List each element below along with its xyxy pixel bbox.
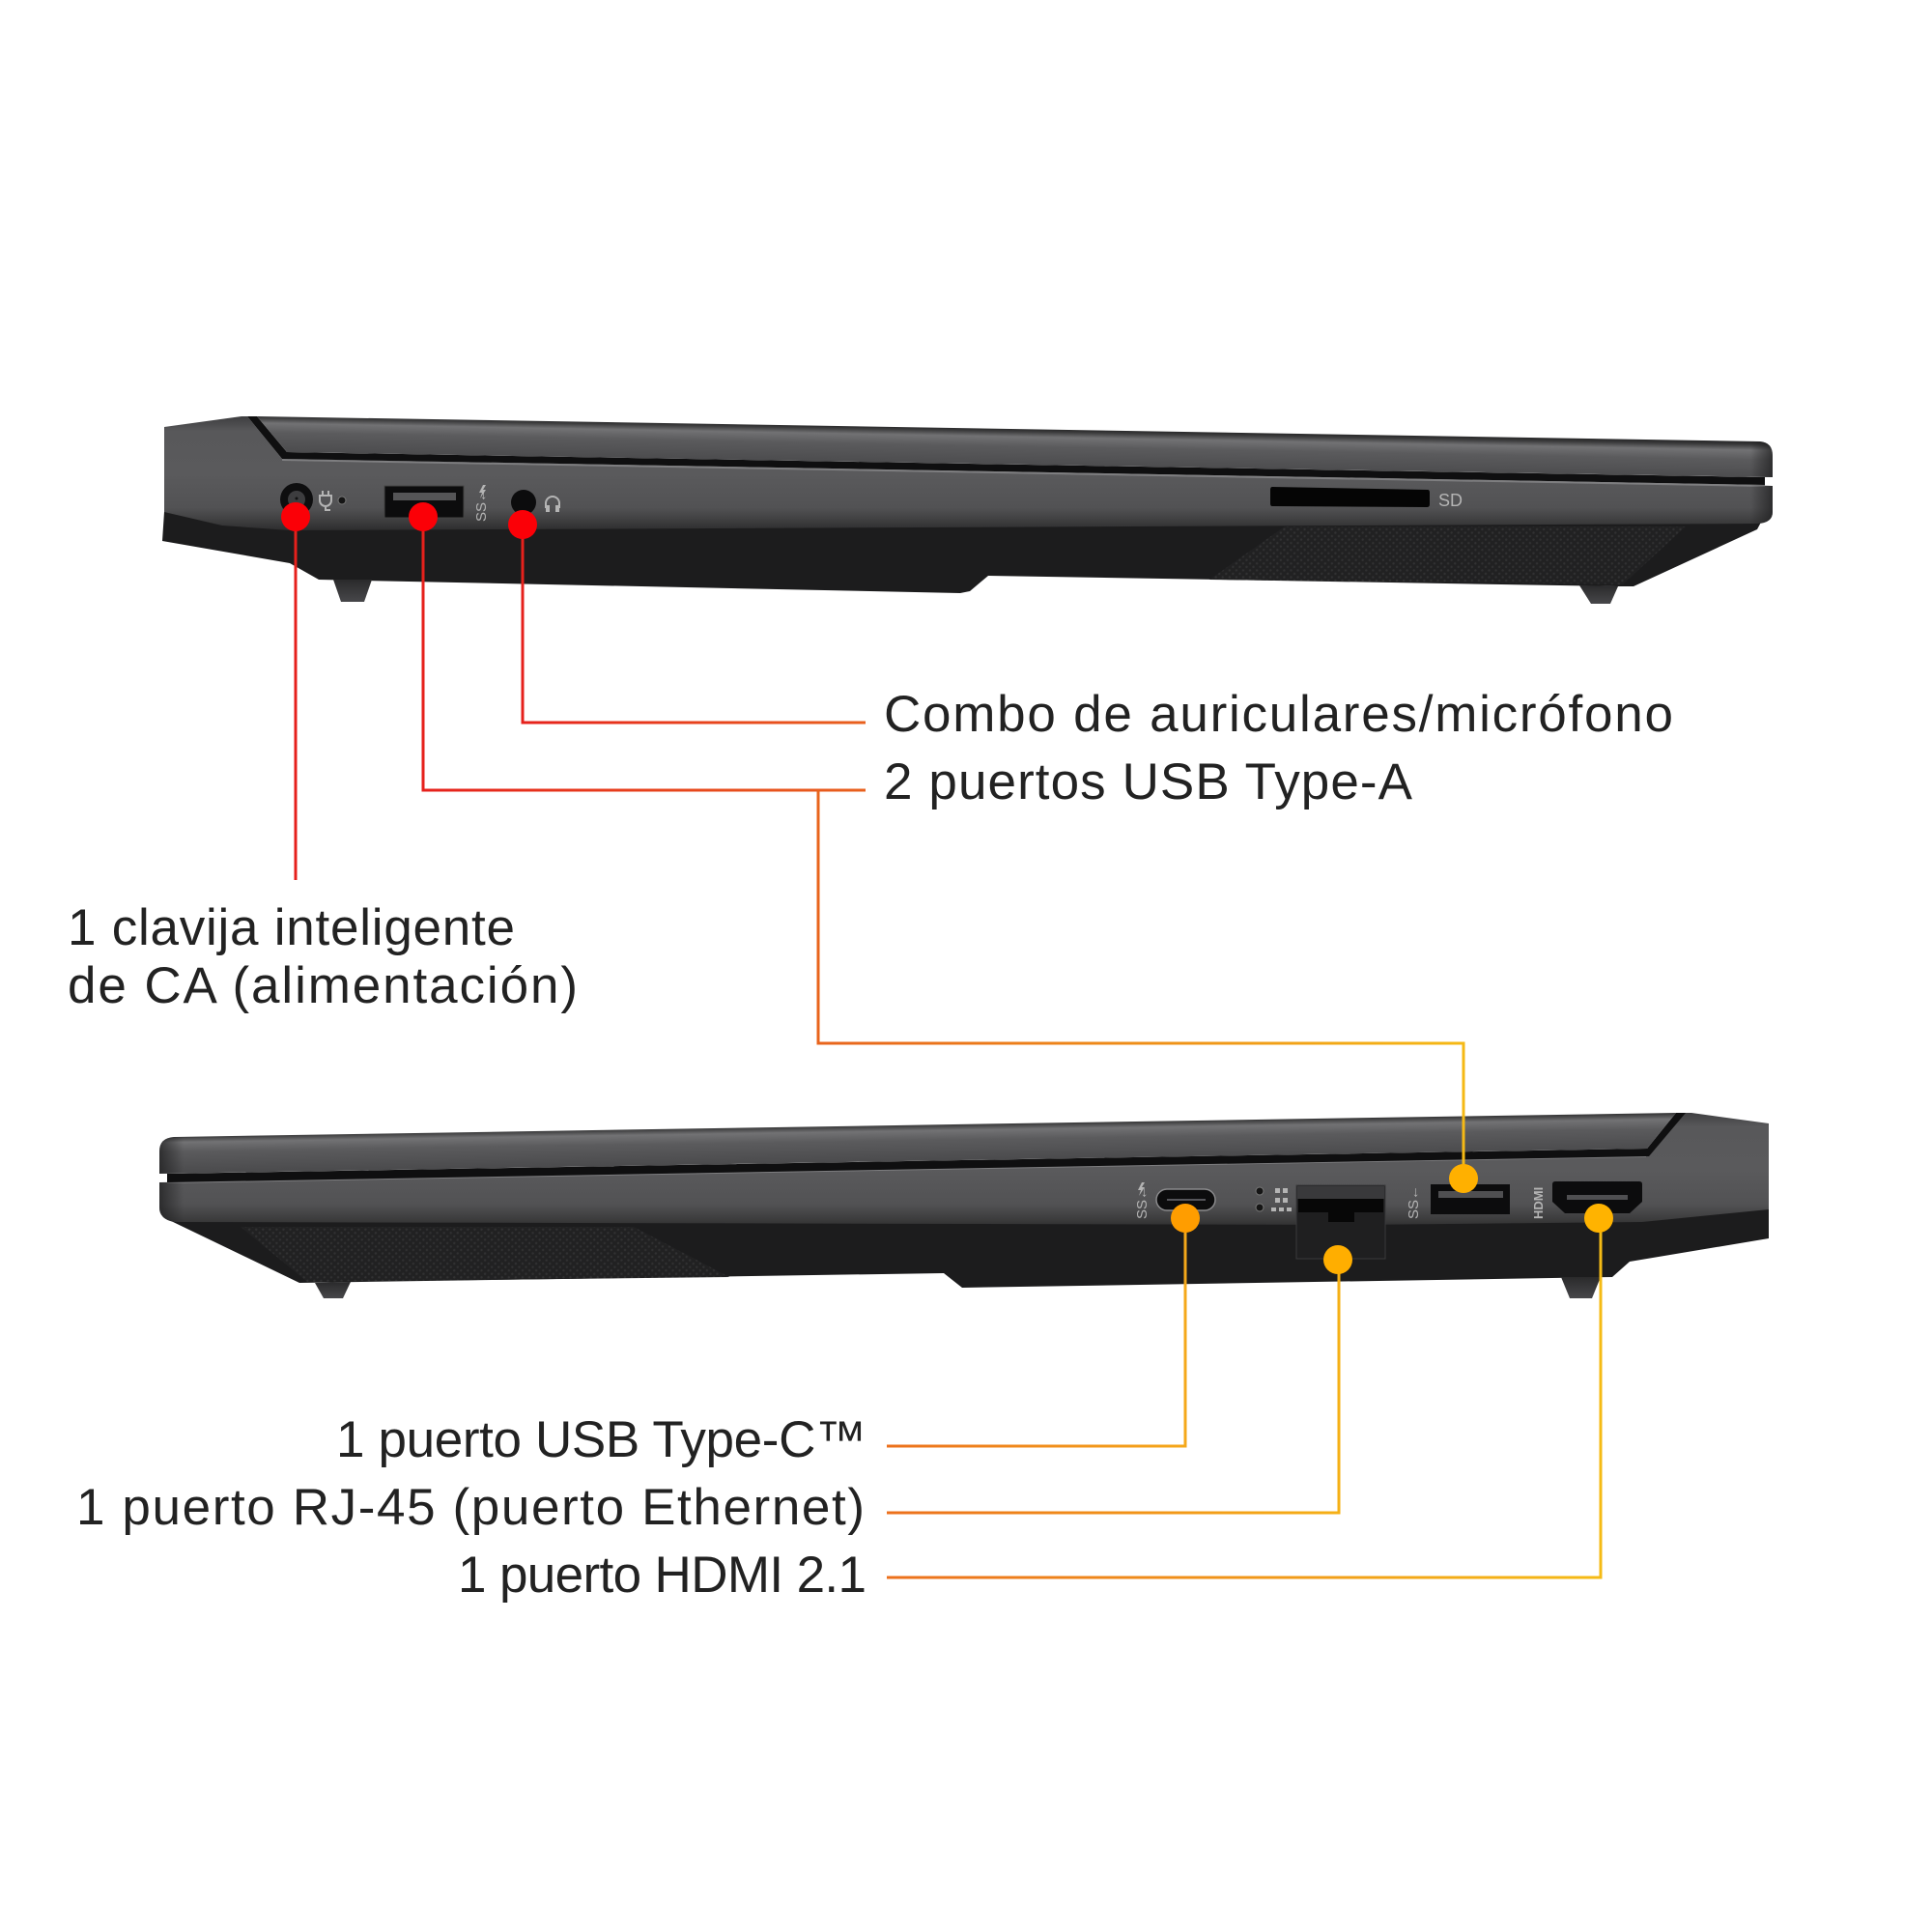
laptop: right side view (159, 1113, 1769, 1298)
right end shading (1750, 441, 1773, 524)
marker: power jack (281, 502, 310, 531)
callout line: usb type-a right (818, 790, 1463, 1179)
status leds (1256, 1187, 1264, 1211)
hinge wedge and gap (247, 416, 1765, 485)
label: usb type-a: 2 puertos USB Type-A (884, 753, 1413, 810)
black lower chassis (162, 502, 1764, 593)
icon: network (1271, 1188, 1292, 1211)
usb-a port (1431, 1184, 1510, 1214)
label: audio combo: Combo de auriculares/micrófono (884, 686, 1673, 743)
marker: usb-a left (409, 502, 438, 531)
sd label: SD (1438, 491, 1463, 510)
laptop: left side view (162, 416, 1773, 604)
callout line: power jack (294, 517, 298, 880)
black lower chassis (169, 1198, 1769, 1288)
usb label: SS← (1134, 1185, 1151, 1219)
marker: audio (508, 510, 537, 539)
marker: hdmi (1584, 1204, 1613, 1233)
usb-c port (1156, 1189, 1215, 1210)
icon: bolt (1138, 1182, 1145, 1196)
usb label: SS← (1406, 1185, 1422, 1219)
hdmi port (1552, 1181, 1642, 1213)
usb label: SS← (473, 488, 490, 522)
marker: usb-c (1171, 1204, 1200, 1233)
rubber foot right (1561, 1277, 1601, 1298)
base highlight (282, 460, 1765, 486)
label: usb type-c: 1 puerto USB Type-C™ (336, 1411, 867, 1468)
audio jack (511, 490, 536, 515)
gray base (164, 416, 1773, 530)
hdmi label: HDMI (1531, 1187, 1546, 1219)
rubber foot left (333, 580, 372, 602)
marker: rj-45 (1323, 1245, 1352, 1274)
label: hdmi: 1 puerto HDMI 2.1 (458, 1547, 867, 1604)
rj-45 port (1296, 1185, 1385, 1259)
speaker mesh (241, 1227, 729, 1282)
label: power jack line 2: de CA (alimentación) (68, 957, 578, 1014)
callout line: usb type-a left (423, 517, 866, 790)
label: power jack: 1 clavija inteligente (68, 899, 515, 956)
speaker mesh (1209, 526, 1686, 584)
icon: plug (320, 491, 331, 510)
lid (159, 1113, 1676, 1174)
status led (338, 497, 346, 504)
gray base (159, 1113, 1769, 1225)
sd slot (1270, 487, 1430, 507)
left end shading (159, 1137, 184, 1222)
callout line: rj-45 (887, 1260, 1339, 1513)
usb-a port (384, 486, 464, 518)
icon: bolt (479, 485, 486, 498)
hinge wedge and gap (167, 1113, 1686, 1182)
lid (257, 416, 1773, 477)
callout line: audio combo (523, 525, 866, 723)
callout line: usb type-c (887, 1218, 1185, 1446)
rubber foot right (1579, 585, 1618, 604)
marker: usb-a right (1449, 1164, 1478, 1193)
power jack (280, 483, 313, 516)
label: rj-45: 1 puerto RJ-45 (puerto Ethernet) (76, 1479, 865, 1536)
rubber foot left (315, 1282, 351, 1298)
base highlight (167, 1156, 1646, 1182)
icon: headset (546, 497, 559, 511)
callout line: hdmi (887, 1218, 1601, 1577)
